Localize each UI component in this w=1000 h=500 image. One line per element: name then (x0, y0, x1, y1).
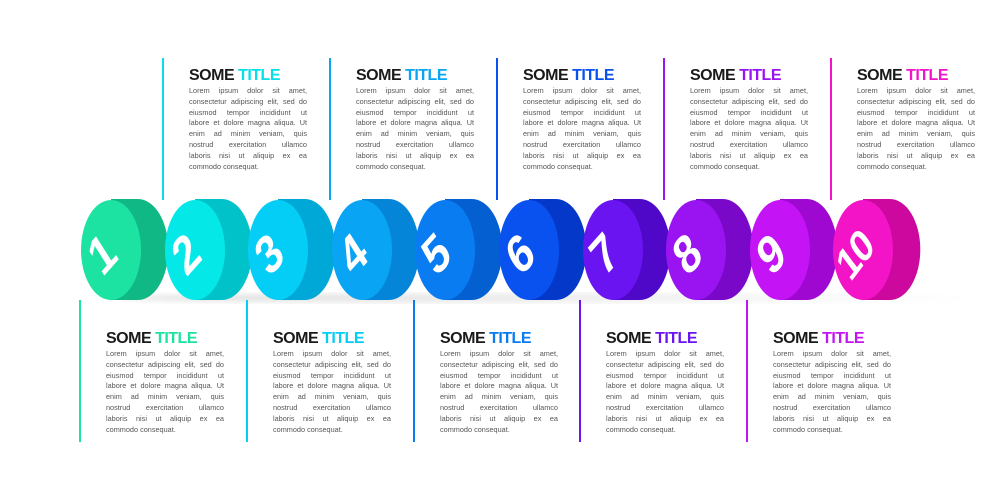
text block 9: nostrud exercitation ullamco (773, 403, 891, 412)
text block 10: commodo consequat. (857, 162, 927, 171)
text block 4: eiusmod tempor incididunt ut (356, 108, 474, 117)
text block 2: SOME TITLE (189, 67, 280, 84)
text block 4: Lorem ipsum dolor sit amet, (356, 86, 474, 95)
text block 4: laboris nisi ut aliquip ex ea (356, 151, 474, 160)
text block 2 (189, 67, 307, 171)
text block 8: labore et dolore magna aliqua. Ut (690, 118, 808, 127)
text block 10: labore et dolore magna aliqua. Ut (857, 118, 975, 127)
text block 10: Lorem ipsum dolor sit amet, (857, 86, 975, 95)
text block 5: consectetur adipiscing elit, sed do (440, 360, 558, 369)
text block 4: nostrud exercitation ullamco (356, 140, 474, 149)
text block 8: consectetur adipiscing elit, sed do (690, 97, 808, 106)
text block 6: Lorem ipsum dolor sit amet, (523, 86, 641, 95)
shadow (120, 293, 1000, 303)
text block 8: enim ad minim veniam, quis (690, 129, 808, 138)
text block 1: nostrud exercitation ullamco (106, 403, 224, 412)
text block 5: Lorem ipsum dolor sit amet, (440, 349, 558, 358)
text block 7: SOME TITLE (606, 330, 697, 347)
text block 1: commodo consequat. (106, 425, 176, 434)
text block 7: laboris nisi ut aliquip ex ea (606, 414, 724, 423)
text block 8 (690, 67, 808, 171)
text block 9 (773, 330, 891, 434)
text block 4: labore et dolore magna aliqua. Ut (356, 118, 474, 127)
cylinder 1 (79, 199, 168, 300)
cylinder 8 (664, 199, 753, 300)
text block 4: commodo consequat. (356, 162, 426, 171)
text block 8: commodo consequat. (690, 162, 760, 171)
text block 3: consectetur adipiscing elit, sed do (273, 360, 391, 369)
text block 9: enim ad minim veniam, quis (773, 392, 891, 401)
text block 2: eiusmod tempor incididunt ut (189, 108, 307, 117)
text block 2: commodo consequat. (189, 162, 259, 171)
cylinder 9 (748, 199, 837, 300)
text block 10: consectetur adipiscing elit, sed do (857, 97, 975, 106)
cylinder 6: 6 (497, 222, 544, 287)
text block 6: SOME TITLE (523, 67, 614, 84)
cylinder 10 (828, 199, 920, 300)
text block 10: eiusmod tempor incididunt ut (857, 108, 975, 117)
text block 4: enim ad minim veniam, quis (356, 129, 474, 138)
text block 7: labore et dolore magna aliqua. Ut (606, 381, 724, 390)
text block 6: consectetur adipiscing elit, sed do (523, 97, 641, 106)
text block 3: laboris nisi ut aliquip ex ea (273, 414, 391, 423)
text block 1 (106, 330, 224, 434)
cylinder 6 (497, 199, 586, 300)
cylinder 7 (581, 199, 670, 300)
text block 8: laboris nisi ut aliquip ex ea (690, 151, 808, 160)
text block 3: commodo consequat. (273, 425, 343, 434)
text block 3: eiusmod tempor incididunt ut (273, 371, 391, 380)
text block 5: nostrud exercitation ullamco (440, 403, 558, 412)
text block 3: labore et dolore magna aliqua. Ut (273, 381, 391, 390)
text block 5: enim ad minim veniam, quis (440, 392, 558, 401)
text block 6: commodo consequat. (523, 162, 593, 171)
text block 7: nostrud exercitation ullamco (606, 403, 724, 412)
text block 6: eiusmod tempor incididunt ut (523, 108, 641, 117)
text block 2: enim ad minim veniam, quis (189, 129, 307, 138)
text block 8: eiusmod tempor incididunt ut (690, 108, 808, 117)
cylinder 7: 7 (581, 222, 628, 287)
text block 5: labore et dolore magna aliqua. Ut (440, 381, 558, 390)
text block 10: nostrud exercitation ullamco (857, 140, 975, 149)
text block 8: nostrud exercitation ullamco (690, 140, 808, 149)
text block 2: labore et dolore magna aliqua. Ut (189, 118, 307, 127)
text block 9: Lorem ipsum dolor sit amet, (773, 349, 891, 358)
text block 10 (857, 67, 975, 171)
cylinder 4: 4 (330, 222, 377, 287)
cylinder 9: 9 (748, 222, 795, 287)
text block 4: consectetur adipiscing elit, sed do (356, 97, 474, 106)
text block 9: commodo consequat. (773, 425, 843, 434)
text block 7: consectetur adipiscing elit, sed do (606, 360, 724, 369)
text block 5: commodo consequat. (440, 425, 510, 434)
cylinder 8: 8 (664, 222, 711, 287)
cylinder 5 (413, 199, 502, 300)
text block 6: enim ad minim veniam, quis (523, 129, 641, 138)
text block 2: laboris nisi ut aliquip ex ea (189, 151, 307, 160)
text block 10: enim ad minim veniam, quis (857, 129, 975, 138)
cylinder 3: 3 (246, 222, 293, 287)
text block 1: laboris nisi ut aliquip ex ea (106, 414, 224, 423)
text block 6: nostrud exercitation ullamco (523, 140, 641, 149)
text block 1: Lorem ipsum dolor sit amet, (106, 349, 224, 358)
text block 6 (523, 67, 641, 171)
text block 1: enim ad minim veniam, quis (106, 392, 224, 401)
text block 1: consectetur adipiscing elit, sed do (106, 360, 224, 369)
text block 5: SOME TITLE (440, 330, 531, 347)
text block 2: consectetur adipiscing elit, sed do (189, 97, 307, 106)
text block 9: labore et dolore magna aliqua. Ut (773, 381, 891, 390)
text block 1: SOME TITLE (106, 330, 197, 347)
text block 3: enim ad minim veniam, quis (273, 392, 391, 401)
text block 6: laboris nisi ut aliquip ex ea (523, 151, 641, 160)
text block 10: laboris nisi ut aliquip ex ea (857, 151, 975, 160)
text block 7: Lorem ipsum dolor sit amet, (606, 349, 724, 358)
text block 5 (440, 330, 558, 434)
text block 9: eiusmod tempor incididunt ut (773, 371, 891, 380)
text block 3: nostrud exercitation ullamco (273, 403, 391, 412)
text block 5: laboris nisi ut aliquip ex ea (440, 414, 558, 423)
cylinder 3 (246, 199, 335, 300)
text block 9: consectetur adipiscing elit, sed do (773, 360, 891, 369)
cylinder 10: 10 (828, 220, 881, 290)
text block 4: SOME TITLE (356, 67, 447, 84)
text block 9: laboris nisi ut aliquip ex ea (773, 414, 891, 423)
cylinder 2: 2 (163, 222, 210, 287)
text block 9: SOME TITLE (773, 330, 864, 347)
text block 7: commodo consequat. (606, 425, 676, 434)
text block 3: Lorem ipsum dolor sit amet, (273, 349, 391, 358)
text block 3: SOME TITLE (273, 330, 364, 347)
text block 3 (273, 330, 391, 434)
text block 7: eiusmod tempor incididunt ut (606, 371, 724, 380)
text block 7 (606, 330, 724, 434)
cylinder 2 (163, 199, 252, 300)
cylinder 4 (330, 199, 419, 300)
cylinder 1: 1 (79, 222, 126, 287)
text block 10: SOME TITLE (857, 67, 948, 84)
cylinder 5: 5 (413, 222, 460, 287)
text block 5: eiusmod tempor incididunt ut (440, 371, 558, 380)
text block 4 (356, 67, 474, 171)
text block 8: Lorem ipsum dolor sit amet, (690, 86, 808, 95)
text block 2: nostrud exercitation ullamco (189, 140, 307, 149)
text block 6: labore et dolore magna aliqua. Ut (523, 118, 641, 127)
text block 1: labore et dolore magna aliqua. Ut (106, 381, 224, 390)
text block 7: enim ad minim veniam, quis (606, 392, 724, 401)
text block 1: eiusmod tempor incididunt ut (106, 371, 224, 380)
text block 8: SOME TITLE (690, 67, 781, 84)
text block 2: Lorem ipsum dolor sit amet, (189, 86, 307, 95)
